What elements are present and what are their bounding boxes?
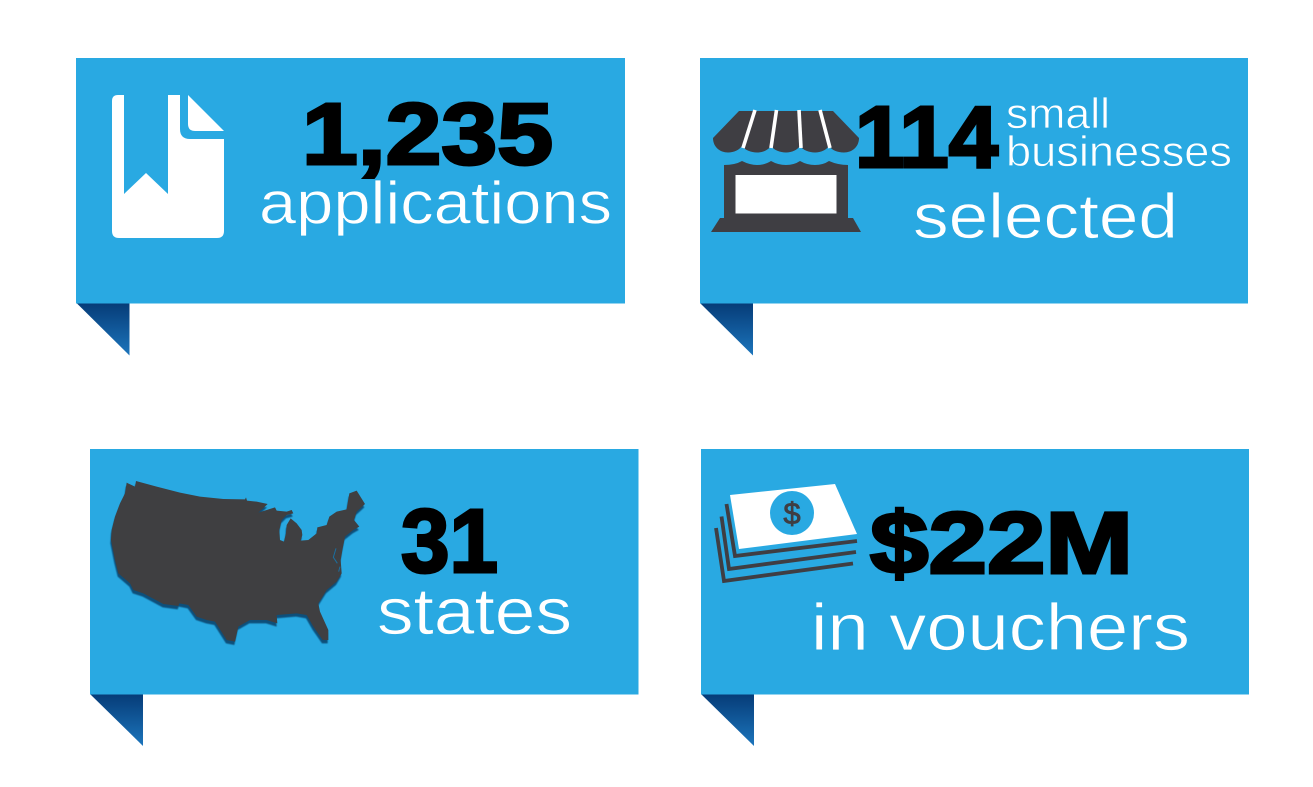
label: states: states <box>377 574 572 648</box>
ribbon fold <box>702 694 754 746</box>
panel: small businesses <box>700 58 1248 356</box>
label: in vouchers: in vouchers <box>811 590 1190 664</box>
label: applications: applications <box>259 170 612 236</box>
panel background <box>90 449 638 694</box>
icon: storefront <box>711 110 861 232</box>
number: 114: 114 <box>855 89 998 186</box>
panel background <box>700 58 1248 304</box>
ribbon fold <box>77 304 130 356</box>
ribbon fold <box>90 694 143 746</box>
icon: stack of money <box>716 484 857 581</box>
panel background <box>701 449 1249 694</box>
panel: vouchers <box>701 449 1249 746</box>
label: selected: selected <box>913 182 1178 252</box>
number: $22M: $22M <box>870 495 1133 592</box>
panel: applications <box>76 58 625 356</box>
panel background <box>76 58 625 304</box>
icon text: dollar sign: $ <box>783 496 801 531</box>
number: 31: 31 <box>401 492 498 592</box>
label: businesses: businesses <box>1006 128 1232 176</box>
ribbon fold <box>700 304 753 356</box>
number: 1,235: 1,235 <box>302 86 553 183</box>
icon: US map <box>110 481 365 645</box>
label: small: small <box>1006 90 1110 138</box>
panel: states <box>90 449 638 746</box>
icon: document with bookmark <box>112 95 224 238</box>
